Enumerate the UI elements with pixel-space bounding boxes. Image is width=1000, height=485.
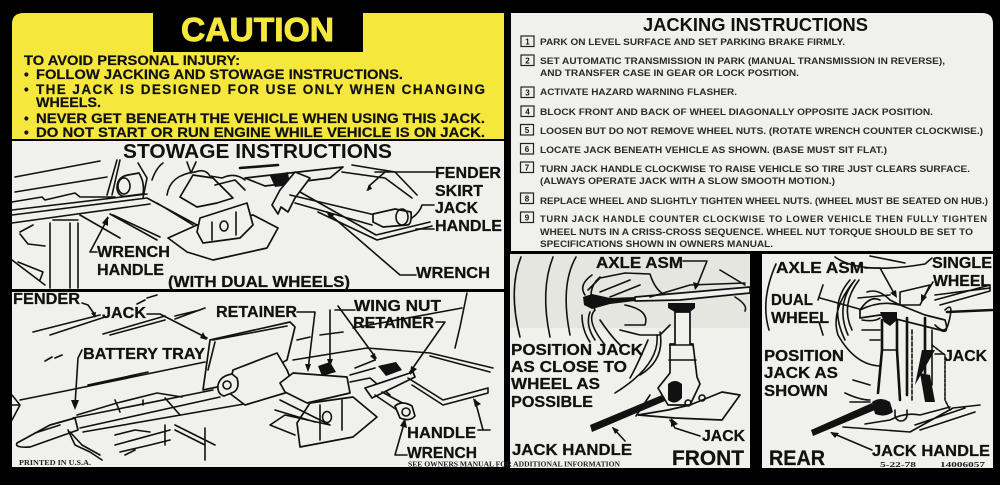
numbered steps: LOCATE JACK BENEATH VEHICLE AS SHOWN. (BASE MUST SIT FLAT.) [540,144,887,155]
callouts: jack labels: FENDER [13,291,80,308]
callouts: rear labels: REAR [769,447,825,470]
numbered steps: 4 [525,108,530,116]
part date code: 5-22-78 [880,461,917,469]
numbered steps: 7 [525,164,530,172]
illustration: rear axle and jack [766,256,992,450]
caution text block: • [24,82,29,97]
part number: 14006057 [940,461,986,469]
numbered steps: AND TRANSFER CASE IN GEAR OR LOCK POSITION. [540,67,799,78]
caution text block: • [24,67,29,82]
panel: caution [12,11,504,140]
numbered steps: ACTIVATE HAZARD WARNING FLASHER. [540,86,737,97]
callouts: front labels: POSITION JACK [511,342,644,359]
callouts: stowage labels: SKIRT [435,183,484,200]
callouts: stowage labels: WRENCH [416,265,490,282]
caution text block: DO NOT START OR RUN ENGINE WHILE VEHICLE IS ON JACK. [36,125,485,140]
callouts: rear labels: JACK [944,348,988,365]
callouts: stowage labels [97,165,502,291]
numbered steps: 1 [525,38,530,46]
heading: caution: CAUTION [181,11,334,48]
callouts: jack labels: BATTERY TRAY [83,346,206,363]
numbered steps: REPLACE WHEEL AND SLIGHTLY TIGHTEN WHEEL NUTS. (WHEEL MUST BE SEATED ON HUB.) [540,195,988,206]
callouts: front labels: JACK [702,428,746,445]
callouts: stowage labels: WRENCH [97,244,170,261]
numbered steps: 6 [525,145,530,154]
callouts: stowage labels: HANDLE [97,262,164,279]
panel: rear jack position [762,254,993,470]
numbered steps: TURN JACK HANDLE CLOCKWISE TO RAISE VEHICLE SO TIRE JUST CLEARS SURFACE. [540,163,970,174]
callouts: front labels: AS CLOSE TO [511,359,627,376]
callouts: stowage labels: FENDER [435,165,501,182]
callouts: rear labels: AXLE ASM [776,260,864,277]
callouts: jack labels: RETAINER [353,315,434,332]
callouts: stowage labels: HANDLE [435,218,502,235]
heading: jacking instructions: JACKING INSTRUCTIONS [643,15,868,35]
caution text block: WHEELS. [36,95,101,110]
numbered steps: 2 [525,56,530,66]
callouts: rear labels: POSITION [764,348,844,365]
callouts: stowage labels: JACK [435,200,479,217]
numbered steps: TURN JACK HANDLE COUNTER CLOCKWISE TO LOWER VEHICLE THEN FULLY TIGHTEN [540,213,987,224]
callouts: rear labels: WHEEL [771,310,829,327]
numbered steps: 9 [525,214,530,222]
numbered steps: WHEEL NUTS IN A CRISS-CROSS SEQUENCE. WHEEL NUT TORQUE SHOULD BE SET TO [540,226,973,237]
callouts: jack labels: WING NUT [354,298,442,315]
caution text block [24,53,485,140]
callouts: jack labels: HANDLE [407,425,476,442]
caution text block: • [24,125,29,140]
callouts: rear labels: SINGLE [932,255,992,272]
callouts: front labels: FRONT [672,447,744,470]
numbered steps: 5 [525,126,530,135]
numbered steps [520,36,988,249]
panel: stowage instructions [12,140,504,291]
callouts: jack labels: JACK [102,305,147,322]
numbered steps: BLOCK FRONT AND BACK OF WHEEL DIAGONALLY OPPOSITE JACK POSITION. [540,106,933,117]
heading: stowage instructions: STOWAGE INSTRUCTIONS [123,140,392,163]
numbered steps: PARK ON LEVEL SURFACE AND SET PARKING BRAKE FIRMLY. [540,36,845,47]
illustration: stowed jack [12,160,435,288]
callouts: rear labels: WHEEL [933,273,990,290]
numbered steps: SPECIFICATIONS SHOWN IN OWNERS MANUAL. [540,238,773,249]
numbered steps: 8 [525,194,530,204]
panel: front jack position [510,254,750,470]
callouts: rear labels: SHOWN [764,383,828,400]
callouts: front labels [511,255,746,470]
caution text block: THE JACK IS DESIGNED FOR USE ONLY WHEN CHANGING [36,82,485,97]
callouts: front labels: JACK HANDLE [512,442,632,459]
illustration: jack and retainer [10,293,493,460]
numbered steps: SET AUTOMATIC TRANSMISSION IN PARK (MANUAL TRANSMISSION IN REVERSE), [540,55,945,66]
panel: jacking instructions [511,13,993,251]
callouts: front labels: POSSIBLE [511,394,593,411]
footnote: see owners manual: SEE OWNERS MANUAL FOR ADDITIONAL INFORMATION [408,460,621,468]
callouts: rear labels: JACK AS [764,365,838,382]
callouts: jack labels: RETAINER [216,304,297,321]
footnote: printed in USA: PRINTED IN U.S.A. [19,459,91,467]
callouts: front labels: WHEEL AS [511,376,600,393]
caution text block: FOLLOW JACKING AND STOWAGE INSTRUCTIONS. [36,67,403,82]
numbered steps: (ALWAYS OPERATE JACK WITH A SLOW SMOOTH MOTION.) [540,175,835,186]
callouts: jack labels [13,291,477,462]
callouts: stowage labels: (WITH DUAL WHEELS) [168,274,350,291]
illustration: front axle and jack [514,257,750,441]
numbered steps: 3 [525,88,530,98]
panel: jack stowage detail [10,291,504,467]
caution text block: TO AVOID PERSONAL INJURY: [24,53,240,68]
callouts: jack labels: WRENCH [407,445,477,462]
caution text block: NEVER GET BENEATH THE VEHICLE WHEN USING THIS JACK. [36,111,485,126]
callouts: rear labels [764,255,992,470]
numbered steps: LOOSEN BUT DO NOT REMOVE WHEEL NUTS. (ROTATE WRENCH COUNTER CLOCKWISE.) [540,125,983,136]
callouts: rear labels: JACK HANDLE [872,443,990,460]
callouts: front labels: AXLE ASM [596,255,683,272]
caution text block: • [24,111,29,126]
callouts: rear labels: DUAL [771,292,813,309]
